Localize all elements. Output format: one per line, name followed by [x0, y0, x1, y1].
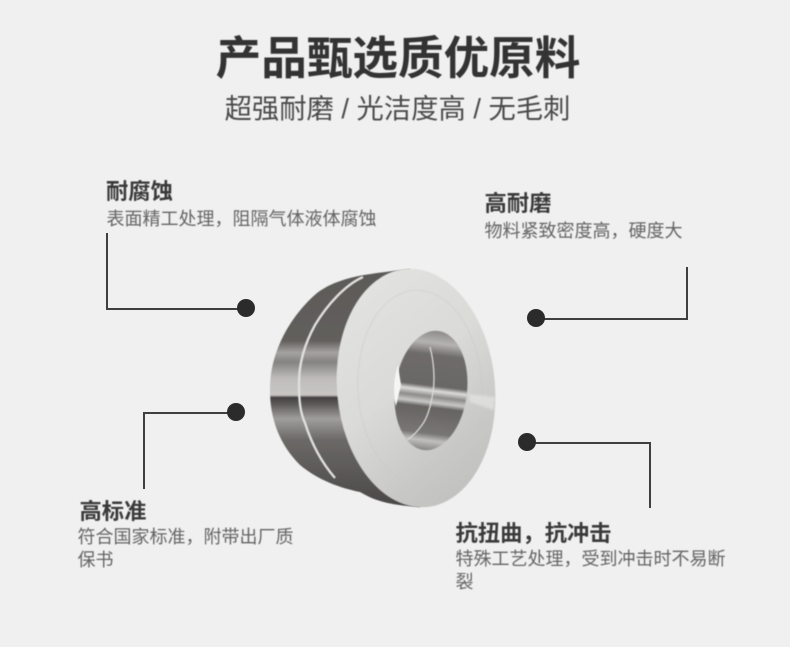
connector line [106, 233, 248, 310]
description: 特殊工艺处理，受到冲击时不易断 [456, 549, 726, 569]
subtitle: 超强耐磨 / 光洁度高 / 无毛刺 [225, 93, 570, 124]
description: 裂 [456, 572, 474, 592]
face highlight sheen [468, 394, 495, 410]
heading: 耐腐蚀 [106, 179, 173, 204]
face rings [353, 287, 487, 489]
connector line [536, 267, 688, 320]
marker dot [237, 299, 255, 317]
marker dot [518, 433, 536, 451]
marker dot [527, 309, 545, 327]
description [456, 548, 726, 592]
bright slit in the band [299, 277, 363, 478]
description: 表面精工处理，阻隔气体液体腐蚀 [106, 209, 376, 229]
heading: 高耐磨 [484, 191, 551, 216]
inner slit [407, 347, 434, 440]
callout: high wear resistance [484, 191, 688, 327]
description [78, 526, 294, 570]
marker dot [227, 403, 245, 421]
description: 保书 [78, 550, 114, 570]
heading: 抗扭曲，抗冲击 [456, 521, 612, 546]
connector line [527, 442, 651, 508]
callout: torsion and impact resistance [455, 433, 726, 592]
coil centre hole [388, 327, 474, 454]
heading: 高标准 [80, 499, 146, 524]
coil front face [327, 262, 505, 514]
callout: high standard [78, 403, 294, 570]
title: 产品甄选质优原料 [216, 33, 580, 84]
connector line [143, 412, 237, 489]
coil outer band [270, 269, 420, 507]
inner hole bright edge [394, 365, 401, 406]
callout: corrosion resistance [106, 179, 376, 317]
description: 符合国家标准，附带出厂质 [78, 527, 294, 547]
description: 物料紧致密度高，硬度大 [484, 221, 682, 241]
